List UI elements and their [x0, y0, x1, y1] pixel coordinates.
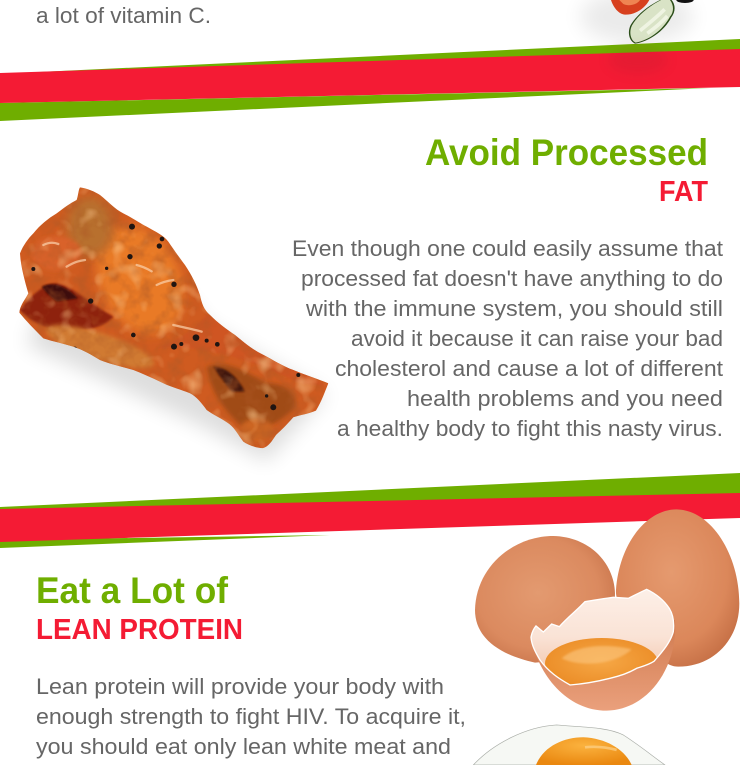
body text: lean protein paragraph: you should eat only lean white meat and: [36, 734, 451, 759]
image: chicken drumstick: [13, 183, 333, 462]
body text: lean protein paragraph: [36, 674, 466, 759]
subheading: LEAN PROTEIN: LEAN PROTEIN: [36, 614, 243, 646]
body text: processed fat paragraph: cholesterol and cause a lot of different: [335, 356, 723, 381]
body text: lean protein paragraph: Lean protein will provide your body with: [36, 674, 444, 699]
body text: processed fat paragraph: with the immune system, you should still: [305, 296, 723, 321]
icon: salad vegetables: [580, 0, 694, 44]
image: eggs: [475, 509, 739, 711]
image: fried egg on plate: [473, 725, 665, 765]
heading: Avoid Processed: Avoid Processed: [425, 132, 708, 173]
band: lower ribbon: [0, 473, 740, 548]
body text: processed fat paragraph: avoid it because it can raise your bad: [351, 326, 723, 351]
body text: processed fat paragraph: [292, 236, 723, 441]
body text: processed fat paragraph: a healthy body to fight this nasty virus.: [337, 416, 723, 441]
body text: vitamin C: a lot of vitamin C.: [36, 3, 211, 28]
band: upper ribbon: [0, 39, 740, 121]
heading: Eat a Lot of: Eat a Lot of: [36, 570, 229, 611]
body text: processed fat paragraph: health problems and you need: [407, 386, 723, 411]
body text: processed fat paragraph: processed fat doesn't have anything to do: [301, 266, 723, 291]
subheading: FAT: FAT: [659, 176, 708, 208]
body text: lean protein paragraph: enough strength to fight HIV. To acquire it,: [36, 704, 466, 729]
body text: processed fat paragraph: Even though one could easily assume that: [292, 236, 723, 261]
